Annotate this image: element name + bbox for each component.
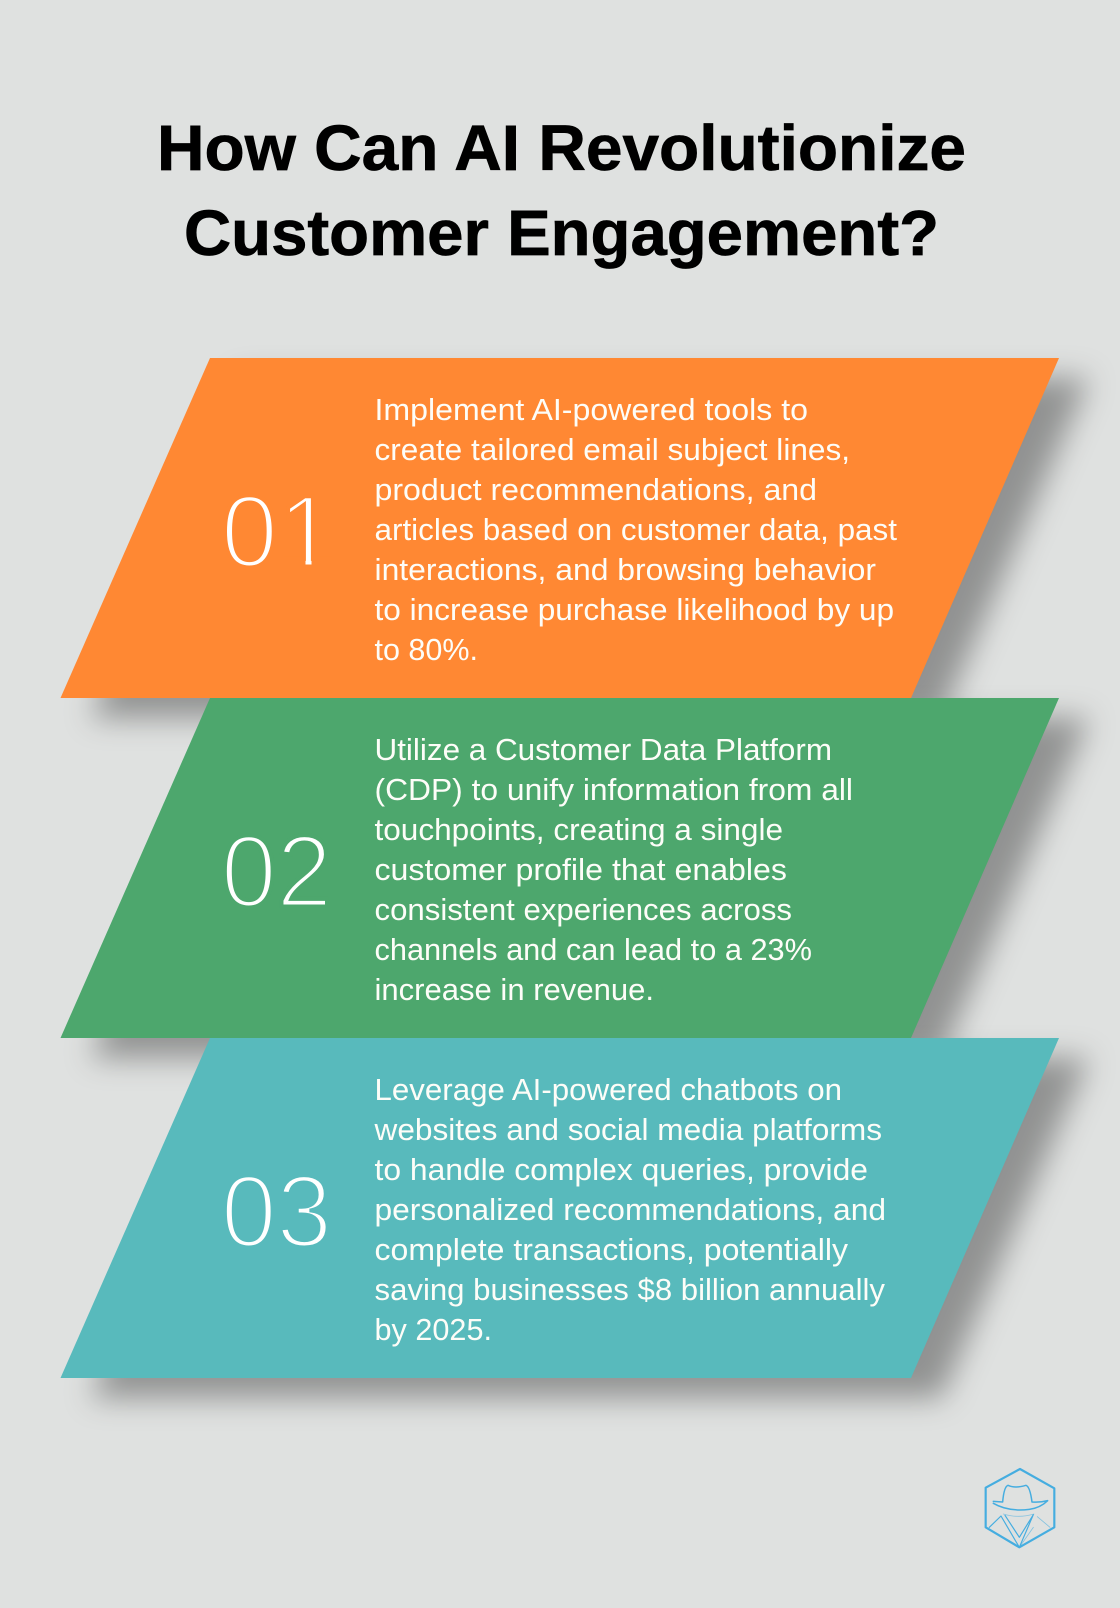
icon: detective logo (986, 1469, 1054, 1547)
step 02 description: touchpoints, creating a single (374, 812, 783, 847)
step 01 description: articles based on customer data, past (374, 512, 897, 547)
panel: step 03 (60, 1038, 1059, 1378)
step 02 description: channels and can lead to a 23% (374, 932, 812, 967)
title: How Can AI Revolutionize (157, 112, 966, 184)
panel: step 01 (60, 358, 1059, 698)
step 01 description: interactions, and browsing behavior (374, 552, 876, 587)
panel shadows (90, 378, 1089, 1398)
step 01 description: to increase purchase likelihood by up (374, 592, 894, 627)
step 03 description: by 2025. (374, 1312, 492, 1347)
step 03 description (373, 1072, 886, 1347)
step number 01: 01 (221, 474, 335, 588)
title (157, 112, 966, 269)
step 02 description: increase in revenue. (374, 972, 654, 1007)
step 01 description: create tailored email subject lines, (374, 432, 850, 467)
step 03 description: to handle complex queries, provide (374, 1152, 868, 1187)
step number 03: 03 (221, 1154, 332, 1268)
step 03 description: personalized recommendations, and (374, 1192, 886, 1227)
step 03 description: websites and social media platforms (373, 1112, 882, 1147)
step 01 description (374, 392, 897, 667)
panel: step 02 (60, 698, 1059, 1038)
step 02 description: customer profile that enables (374, 852, 787, 887)
step 02 description: consistent experiences across (374, 892, 792, 927)
step 02 description (374, 732, 853, 1007)
step 03 description: saving businesses $8 billion annually (374, 1272, 885, 1307)
step number 02: 02 (221, 814, 332, 928)
step 02 description: (CDP) to unify information from all (374, 772, 853, 807)
step 01 description: to 80%. (374, 632, 478, 667)
step 03 description: Leverage AI-powered chatbots on (374, 1072, 842, 1107)
step 03 description: complete transactions, potentially (374, 1232, 849, 1267)
title: Customer Engagement? (184, 197, 939, 269)
step 01 description: Implement AI-powered tools to (374, 392, 808, 427)
step 01 description: product recommendations, and (374, 472, 817, 507)
step 02 description: Utilize a Customer Data Platform (374, 732, 832, 767)
